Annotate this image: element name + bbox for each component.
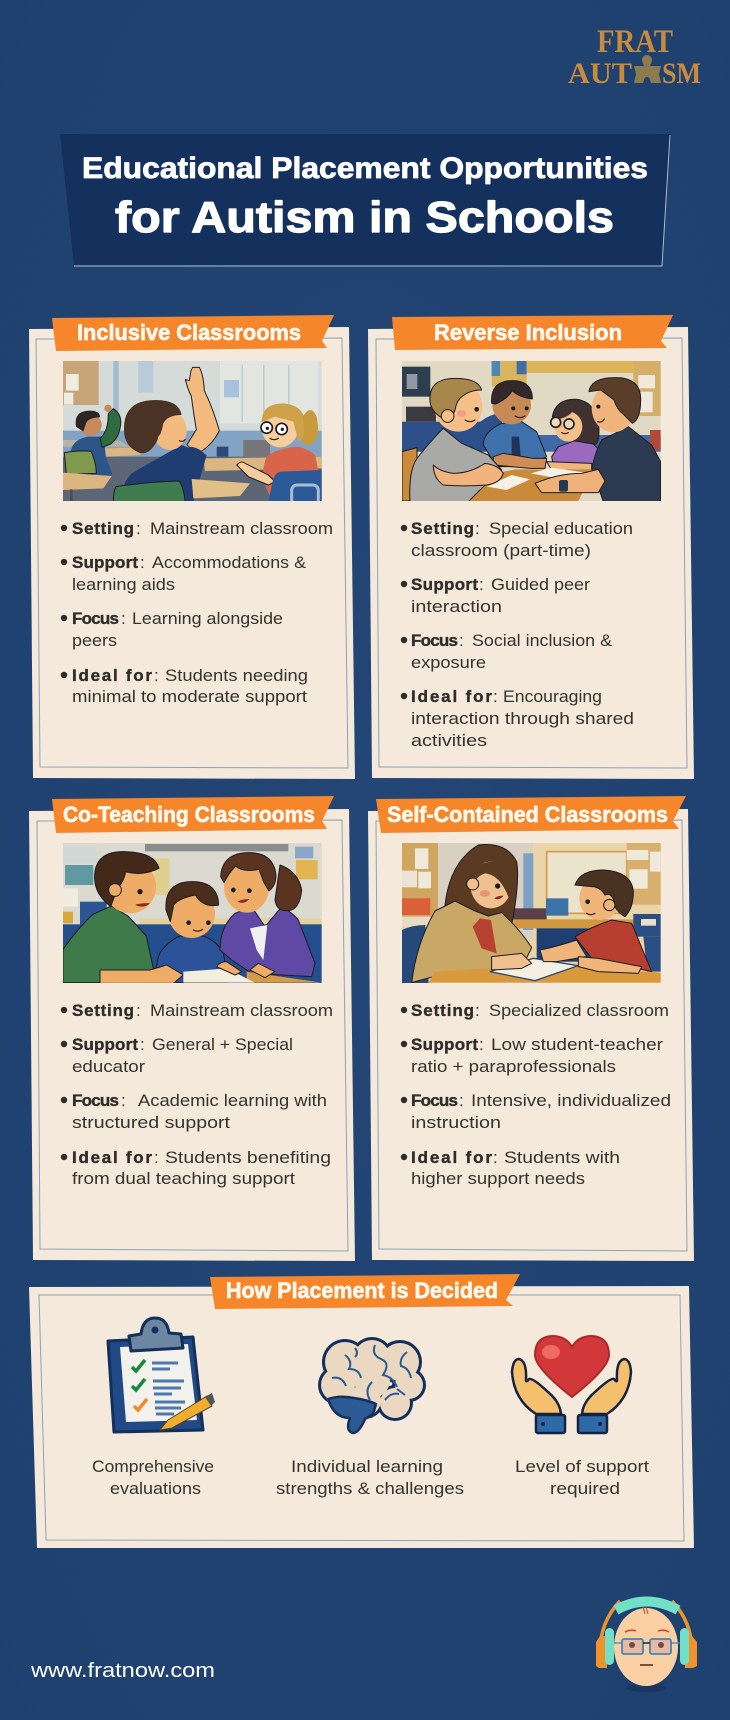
text: Self-Contained details: :	[475, 1001, 480, 1020]
text: Self-Contained details: Low student-teacher	[491, 1035, 663, 1054]
text: Reverse Inclusion details: Social inclusion &	[472, 631, 613, 650]
text: Reverse Inclusion details: :	[493, 687, 498, 706]
text: Reverse Inclusion details: Ideal for	[411, 687, 492, 706]
text: Self-Contained details: :	[479, 1035, 484, 1054]
ribbon: Self-Contained Classrooms: Self-Contained Classrooms	[387, 802, 668, 827]
text: Inclusive Classrooms details: peers	[72, 631, 117, 650]
image: two teachers with a boy reading	[63, 843, 322, 983]
text: Co-Teaching details: Ideal for	[72, 1148, 152, 1167]
label: Individual learning strengths and challenges: Individual learning	[291, 1457, 443, 1476]
text: Self-Contained details: Intensive, individualized	[471, 1091, 671, 1110]
text: Reverse Inclusion details: :	[479, 575, 484, 594]
label: Comprehensive evaluations: Comprehensive	[92, 1457, 214, 1476]
text: Inclusive Classrooms details: :	[136, 519, 141, 538]
label: Comprehensive evaluations	[92, 1457, 214, 1498]
text: Reverse Inclusion details: Setting	[411, 519, 474, 538]
text: Co-Teaching details: Academic learning with	[138, 1091, 327, 1110]
label: Comprehensive evaluations: evaluations	[110, 1479, 201, 1498]
text: Co-Teaching details: :	[154, 1148, 159, 1167]
text: Inclusive Classrooms details: :	[140, 553, 145, 572]
text: Co-Teaching details: General + Special	[152, 1035, 293, 1054]
title banner	[60, 134, 671, 266]
text: Co-Teaching details: educator	[72, 1057, 145, 1076]
text: Self-Contained details: Setting	[411, 1001, 474, 1020]
ribbon: Reverse Inclusion	[392, 315, 673, 350]
text: Inclusive Classrooms details: Support	[72, 553, 138, 572]
ribbon: Inclusive Classrooms	[52, 315, 334, 351]
ribbon: Co-Teaching Classrooms	[52, 796, 334, 833]
website url: www.fratnow.com	[30, 1660, 215, 1682]
text: Inclusive Classrooms details: Focus	[72, 609, 119, 628]
text: Inclusive Classrooms details: Setting	[72, 519, 134, 538]
text: Co-Teaching details: Support	[72, 1035, 138, 1054]
ribbon: Reverse Inclusion: Reverse Inclusion	[434, 320, 622, 345]
text: Self-Contained details: Ideal for	[411, 1148, 492, 1167]
text: Reverse Inclusion details: Encouraging	[503, 687, 602, 706]
text: Inclusive Classrooms details: Mainstream classroom	[150, 519, 333, 538]
text: Self-Contained details: :	[493, 1148, 498, 1167]
text: Self-Contained details: Focus	[411, 1091, 458, 1110]
text: Reverse Inclusion details: activities	[411, 731, 487, 750]
text: Reverse Inclusion details	[401, 519, 634, 750]
ribbon: How Placement is Decided: How Placement is Decided	[226, 1278, 498, 1303]
text: Reverse Inclusion details: exposure	[411, 653, 486, 672]
text: Self-Contained details: instruction	[411, 1113, 501, 1132]
label: Level of support required	[515, 1457, 649, 1498]
text: Reverse Inclusion details: :	[459, 631, 464, 650]
text: Self-Contained details: Students with	[504, 1148, 620, 1167]
label: Level of support required: Level of support	[515, 1457, 649, 1476]
text: Inclusive Classrooms details: learning aids	[72, 575, 175, 594]
text: Self-Contained details: ratio + paraprofessionals	[411, 1057, 616, 1076]
text: Self-Contained details: :	[459, 1091, 464, 1110]
logo: Frat Autism	[568, 24, 701, 90]
text: Co-Teaching details: Mainstream classroom	[150, 1001, 333, 1020]
logo: Frat Autism: AUT	[568, 57, 632, 90]
logo: Frat Autism: SM	[662, 57, 701, 90]
text: Inclusive Classrooms details	[61, 519, 333, 706]
panel: How Placement is Decided	[29, 1274, 694, 1548]
text: Inclusive Classrooms details: minimal to moderate support	[72, 687, 307, 706]
text: Inclusive Classrooms details: Ideal for	[72, 666, 152, 685]
label: Individual learning strengths and challenges	[276, 1457, 464, 1498]
text: Inclusive Classrooms details: Accommodations &	[152, 553, 307, 572]
icon: brain	[318, 1337, 426, 1433]
text: Co-Teaching details: Students benefiting	[165, 1148, 331, 1167]
title banner: for Autism in Schools	[115, 193, 614, 242]
panel: Reverse Inclusion	[368, 315, 694, 779]
text: Reverse Inclusion details: :	[475, 519, 480, 538]
text: Co-Teaching details: structured support	[72, 1113, 230, 1132]
panel: Co-Teaching Classrooms	[29, 796, 355, 1261]
text: Co-Teaching details: from dual teaching support	[72, 1169, 295, 1188]
image: boy raising hand in classroom	[63, 361, 322, 505]
label: Level of support required: required	[550, 1479, 620, 1498]
text: Reverse Inclusion details: Focus	[411, 631, 458, 650]
image: four students at a table	[402, 361, 661, 502]
text: Self-Contained details: higher support needs	[411, 1169, 585, 1188]
text: Co-Teaching details: :	[121, 1091, 126, 1110]
ribbon: Inclusive Classrooms: Inclusive Classrooms	[77, 320, 301, 345]
icon: hands holding heart	[512, 1336, 631, 1433]
ribbon: How Placement is Decided	[210, 1274, 520, 1309]
text: Reverse Inclusion details: Support	[411, 575, 478, 594]
title banner: Educational Placement Opportunities	[82, 152, 648, 185]
ribbon: Self-Contained Classrooms	[376, 796, 686, 833]
text: Co-Teaching details: :	[140, 1035, 145, 1054]
panel: Inclusive Classrooms	[29, 315, 355, 779]
icon: clipboard checklist	[108, 1318, 215, 1432]
text: Reverse Inclusion details: Guided peer	[491, 575, 590, 594]
text: Co-Teaching details	[61, 1001, 333, 1188]
text: Self-Contained details	[401, 1001, 671, 1188]
text: Self-Contained details: Specialized classroom	[489, 1001, 669, 1020]
text: Self-Contained details: Support	[411, 1035, 478, 1054]
image: teacher helping a boy with a book	[402, 843, 661, 983]
logo: Frat Autism: FRAT	[597, 24, 673, 60]
text: Reverse Inclusion details: Special education	[489, 519, 633, 538]
mascot: head with headphones and glasses	[596, 1601, 697, 1692]
text: Inclusive Classrooms details: Learning alongside	[132, 609, 283, 628]
text: Co-Teaching details: Setting	[72, 1001, 134, 1020]
text: Reverse Inclusion details: interaction	[411, 597, 502, 616]
panel: Self-Contained Classrooms	[368, 796, 694, 1261]
label: Individual learning strengths and challenges: strengths & challenges	[276, 1479, 464, 1498]
ribbon: Co-Teaching Classrooms: Co-Teaching Classrooms	[63, 802, 315, 827]
text: Reverse Inclusion details: interaction through shared	[411, 709, 634, 728]
text: Inclusive Classrooms details: Students needing	[165, 666, 308, 685]
text: Co-Teaching details: Focus	[72, 1091, 119, 1110]
text: Inclusive Classrooms details: :	[154, 666, 159, 685]
text: Inclusive Classrooms details: :	[121, 609, 126, 628]
text: Reverse Inclusion details: classroom (part-time)	[411, 541, 591, 560]
text: Co-Teaching details: :	[136, 1001, 141, 1020]
